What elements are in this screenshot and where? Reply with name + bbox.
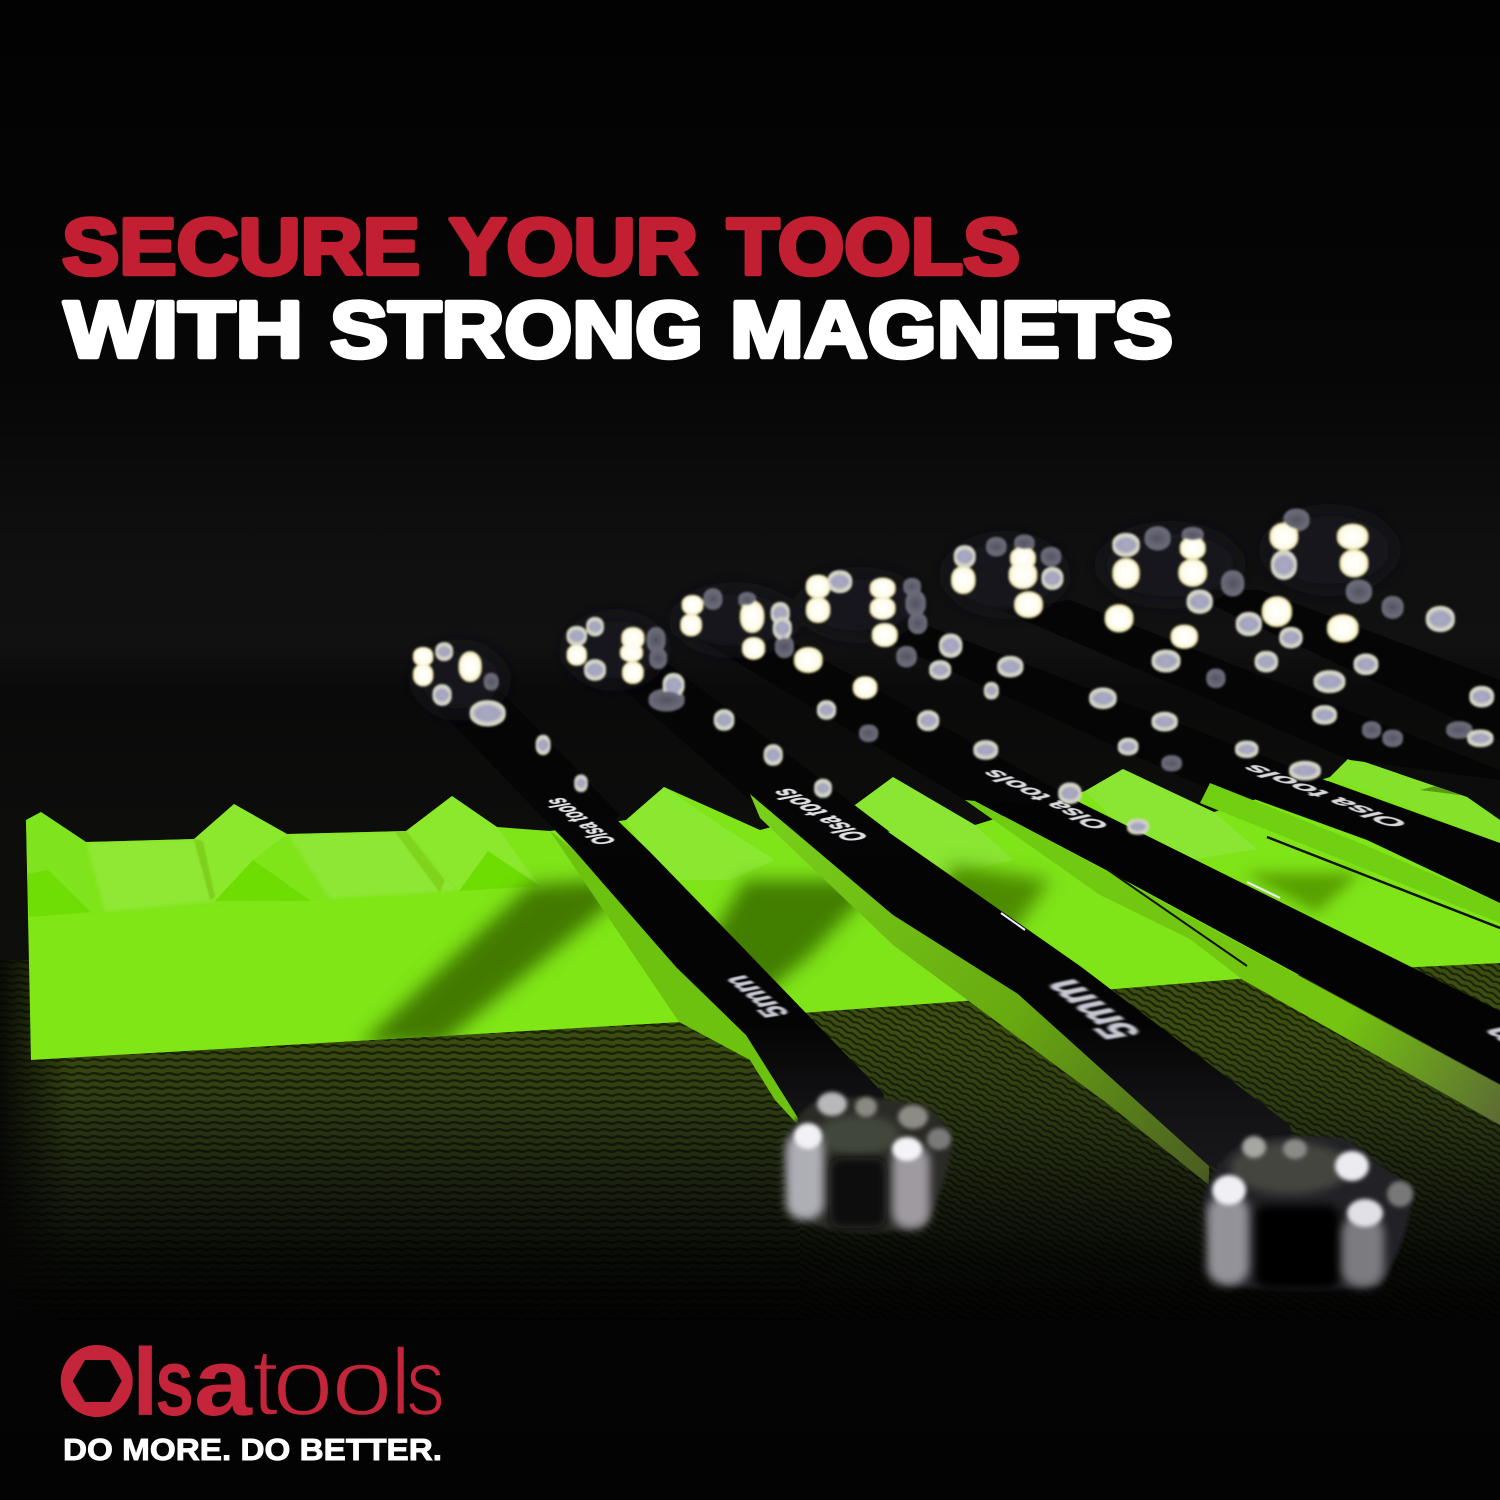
logo wordmark bold [132, 1329, 253, 1436]
headline line 1: SECURE [62, 202, 420, 291]
icon: hex nut letter O [61, 1345, 133, 1417]
bokeh highlights on far wrench heads and handles [413, 510, 1494, 833]
wrench 4 handle [1200, 763, 1500, 928]
near wrench head 1 [783, 1092, 953, 1232]
logo wordmark bold: s [155, 1329, 194, 1436]
logo wordmark light: o [331, 1329, 393, 1436]
logo [61, 1329, 445, 1467]
wrench 2 handle [750, 786, 1300, 1185]
headline line 2: STRONG [330, 285, 703, 374]
holder tooth faces [26, 757, 1500, 1058]
wrench 2 size mark: 5mm [1029, 976, 1153, 1043]
headline line 2 [64, 285, 1173, 374]
wrench 3 handle [965, 768, 1500, 1125]
logo wordmark light: o [272, 1329, 334, 1436]
headline line 1: YOUR [449, 202, 698, 291]
tagline: DO MORE. DO BETTER. [63, 1432, 442, 1467]
logo wordmark bold: l [132, 1329, 159, 1436]
wrench 4 brand mark: Olsa tools [1234, 763, 1416, 829]
wrenches upper shafts dark overlay [420, 590, 1500, 850]
wrench 3 brand mark: Olsa tools [973, 768, 1117, 831]
near wrench head 2 [1204, 1136, 1414, 1290]
logo wordmark light: t [252, 1329, 279, 1436]
wrench 1 handle [497, 760, 884, 1125]
logo wordmark light: s [406, 1329, 445, 1436]
logo wordmark bold: a [194, 1329, 253, 1436]
headline [62, 202, 1173, 374]
logo wordmark light: l [390, 1329, 411, 1436]
logo wordmark light [252, 1329, 445, 1436]
wrench 1 brand mark: Olsa tools [537, 796, 623, 846]
green magnetic holder [26, 757, 1500, 1060]
wrench shadows on holder [360, 880, 610, 1045]
headline line 2: MAGNETS [730, 285, 1173, 374]
wrench 2 brand mark: Olsa tools [761, 786, 877, 843]
mat fabric [0, 960, 1500, 1320]
headline line 1: TOOLS [727, 202, 1020, 291]
holder body [26, 757, 1500, 1060]
headline line 2: WITH [64, 285, 303, 374]
wrench 1 size mark: 5mm [712, 973, 798, 1020]
far wrench heads halo [415, 510, 1395, 715]
headline line 1 [62, 202, 1020, 291]
